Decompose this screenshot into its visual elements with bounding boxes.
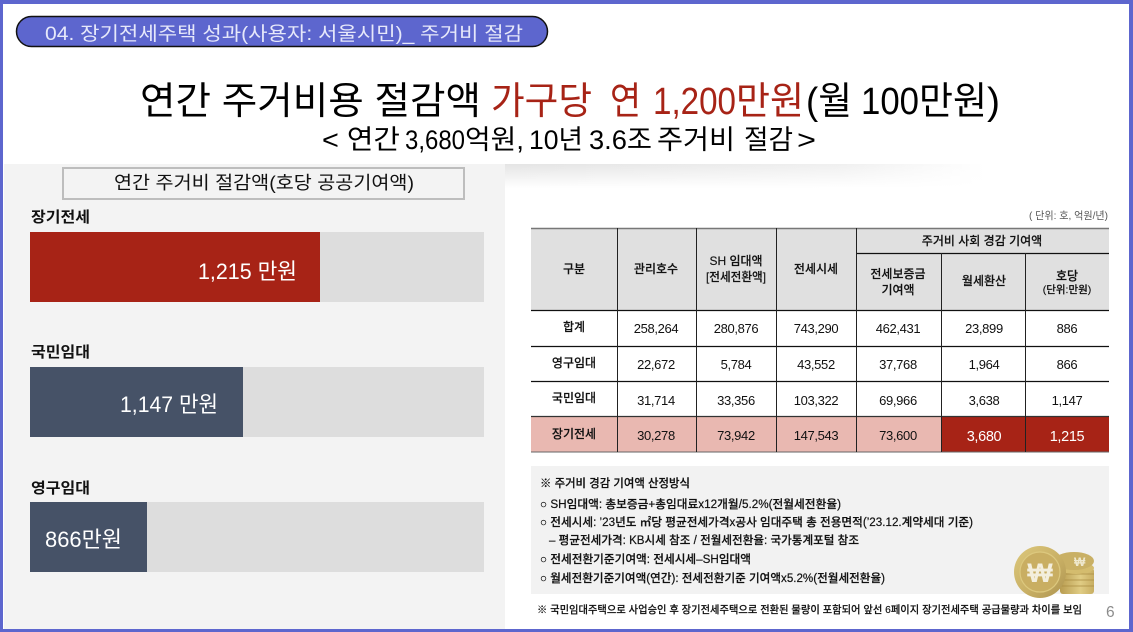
title: 가구당 — [491, 81, 592, 123]
bar: 장기전세: 장기전세 — [31, 209, 90, 226]
row: 영구임대: 1,964 — [969, 357, 1000, 372]
row: 장기전세: 3,680 — [967, 429, 1002, 445]
table header: SH 임대액 — [709, 254, 763, 268]
row: 장기전세 — [552, 427, 1085, 445]
panel: left gray background — [4, 164, 985, 629]
page number: 6 — [1106, 604, 1115, 621]
title: 연 — [610, 81, 641, 123]
panel: calculation notes: – 평균전세가격: KB시세 참조 / 전월세전환율: 국가통계포털 참조 — [549, 533, 859, 547]
icon: gold won coins: ₩ — [1074, 555, 1086, 569]
row: 장기전세: 30,278 — [637, 428, 675, 443]
bar: 영구임대: 영구임대 — [31, 480, 90, 497]
footnote: ※ 국민임대주택으로 사업승인 후 장기전세주택으로 전환된 물량이 포함되어 앞선 6페이지 장기전세주택 공급물량과 차이를 보임 — [537, 603, 1082, 616]
table header: 주거비 사회 경감 기여액 — [922, 234, 1042, 248]
title: 만원 — [919, 81, 987, 123]
subtitle: 억원, — [465, 125, 524, 155]
row: 국민임대: 국민임대 — [552, 391, 596, 405]
subtitle: 주거비 — [657, 125, 735, 155]
row: 합계: 258,264 — [634, 321, 678, 336]
icon: gold won coins: ₩ — [1027, 558, 1053, 588]
bar: 국민임대 — [30, 344, 484, 437]
row: 영구임대: 43,552 — [797, 357, 835, 372]
row: 영구임대: 5,784 — [721, 357, 752, 372]
table header: 관리호수 — [634, 262, 678, 276]
row: 장기전세: 장기전세 — [552, 427, 596, 441]
row: 합계: 743,290 — [794, 321, 838, 336]
row: 영구임대: 37,768 — [879, 357, 917, 372]
row: 국민임대: 31,714 — [637, 393, 675, 408]
subtitle: 3,680 — [405, 125, 465, 155]
row: 국민임대: 33,356 — [717, 393, 755, 408]
table header: 기여액 — [881, 283, 915, 297]
title: 만원 — [736, 81, 804, 123]
icon: gold won coins — [1014, 546, 1094, 598]
bar: 영구임대 — [30, 480, 484, 572]
table header: 월세환산 — [962, 274, 1006, 288]
table header: 전세시세 — [794, 262, 838, 276]
panel: calculation notes — [531, 466, 1109, 594]
title: ) — [987, 81, 1000, 123]
table header: 전세보증금 — [870, 267, 926, 281]
table header — [563, 234, 1091, 297]
table fills — [531, 228, 1109, 452]
panel: calculation notes: ※ 주거비 경감 기여액 산정방식 — [540, 477, 690, 490]
unit label: ( 단위: 호, 억원/년) — [1029, 209, 1108, 222]
bar: 영구임대: 866만원 — [45, 527, 122, 552]
subtitle: 10년 — [529, 125, 583, 155]
row: 국민임대 — [552, 391, 1083, 408]
row: 영구임대: 22,672 — [637, 357, 675, 372]
row: 국민임대: 3,638 — [969, 393, 1000, 408]
table header: (단위:만원) — [1043, 283, 1091, 296]
data table — [531, 228, 1109, 452]
title: (월 — [806, 81, 852, 123]
title: 100 — [861, 81, 919, 123]
table header: 호당 — [1056, 269, 1078, 283]
subtitle: > — [797, 125, 816, 155]
row: 합계: 280,876 — [714, 321, 758, 336]
row: 합계: 합계 — [563, 319, 585, 334]
row: 합계: 462,431 — [876, 321, 920, 336]
panel: calculation notes: ○ 전세시세: ’23년도 ㎡당 평균전세가격x공사 임대주택 총 전용면적(’23.12.계약세대 기준) — [540, 515, 973, 529]
row: 국민임대: 103,322 — [794, 393, 838, 408]
row: 합계: 886 — [1057, 321, 1077, 336]
panel: calculation notes: ○ 전세전환기준기여액: 전세시세–SH임대액 — [540, 552, 751, 566]
row: 영구임대: 영구임대 — [552, 356, 596, 370]
chart heading box: 연간 주거비 절감액(호당 공공기여액) — [114, 173, 414, 193]
panel: calculation notes: ○ SH임대액: 총보증금+총임대료x12개월/5.2%(전월세전환율) — [540, 497, 841, 511]
row: 장기전세: 147,543 — [794, 428, 838, 443]
row: 장기전세: 73,942 — [717, 428, 755, 443]
subtitle: 절감 — [744, 125, 793, 155]
row: 장기전세: 1,215 — [1050, 429, 1085, 445]
row: 합계 — [563, 319, 1077, 336]
row: 국민임대: 69,966 — [879, 393, 917, 408]
row: 영구임대: 866 — [1057, 357, 1077, 372]
table grid — [531, 228, 1109, 452]
title: 연간 주거비용 절감액 — [140, 81, 481, 123]
section header pill — [16, 16, 548, 46]
row: 합계: 23,899 — [965, 321, 1003, 336]
bar: 국민임대: 1,147 만원 — [120, 392, 218, 417]
title — [140, 81, 1000, 123]
section header pill: 04. 장기전세주택 성과(사용자: 서울시민)_ 주거비 절감 — [45, 23, 523, 45]
row: 장기전세: 73,600 — [879, 428, 917, 443]
bar: 장기전세 — [30, 209, 484, 302]
title: 1,200 — [653, 81, 736, 123]
row: 영구임대 — [552, 356, 1077, 372]
bar: 장기전세: 1,215 만원 — [198, 259, 297, 284]
panel: calculation notes: ○ 월세전환기준기여액(연간): 전세전환기준 기여액x5.2%(전월세전환율) — [540, 572, 885, 585]
subtitle: < 연간 — [322, 125, 400, 155]
subtitle: 3.6조 — [589, 125, 652, 155]
subtitle — [322, 125, 816, 155]
bar chart: annual housing cost savings — [30, 209, 484, 572]
table header: [전세전환액] — [706, 270, 766, 284]
row: 국민임대: 1,147 — [1052, 393, 1083, 408]
bar: 국민임대: 국민임대 — [31, 344, 90, 361]
chart heading box — [63, 168, 464, 199]
table header: 구분 — [563, 262, 585, 276]
